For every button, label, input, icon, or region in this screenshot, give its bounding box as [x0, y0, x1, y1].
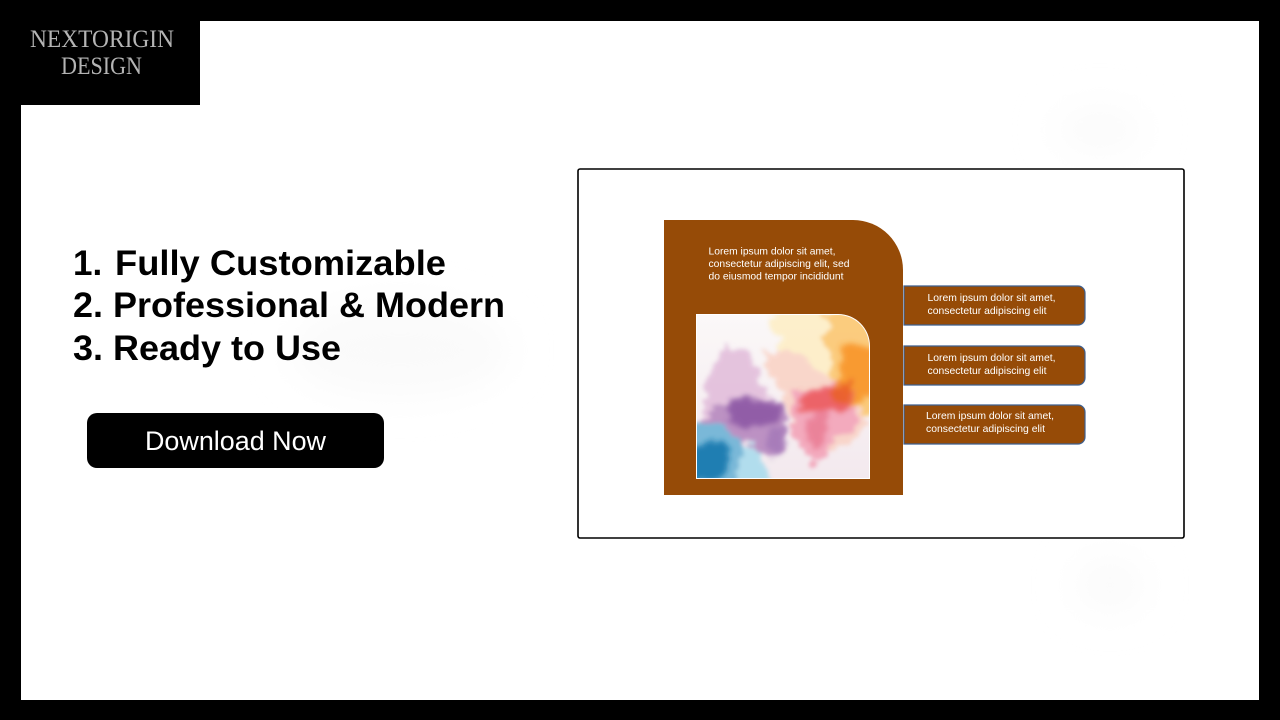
watercolor image [696, 314, 870, 479]
callout bar 2: consectetur adipiscing elit [928, 365, 1047, 377]
feature list: 1. [73, 244, 102, 283]
logo text: NEXTORIGIN [30, 26, 174, 53]
feature list: 3. Ready to Use [73, 329, 341, 368]
logo block [21, 21, 200, 105]
feature list [73, 244, 505, 368]
card text [708, 246, 850, 282]
callout bar 3: consectetur adipiscing elit [926, 423, 1045, 435]
feature list: Fully Customizable [115, 244, 446, 283]
download button: Download Now [145, 426, 326, 456]
card text: do eiusmod tempor incididunt [708, 270, 844, 282]
download button [87, 413, 384, 468]
callout bar 3: Lorem ipsum dolor sit amet, [926, 410, 1054, 422]
callout bar 1: consectetur adipiscing elit [928, 305, 1047, 317]
slide preview panel [578, 169, 1184, 538]
callout bar 3 [904, 405, 1085, 444]
callout bar 1 [904, 286, 1085, 325]
feature list: 2. Professional & Modern [73, 286, 505, 325]
callout bar 2 [904, 346, 1085, 385]
card text: consectetur adipiscing elit, sed [708, 258, 850, 270]
callout bar 1: Lorem ipsum dolor sit amet, [928, 292, 1056, 304]
logo text [30, 26, 174, 80]
main brown card [664, 220, 903, 495]
callout bar 2: Lorem ipsum dolor sit amet, [928, 352, 1056, 364]
faint background smudges [290, 110, 1145, 610]
card text: Lorem ipsum dolor sit amet, [708, 246, 836, 258]
logo text: DESIGN [61, 53, 142, 80]
